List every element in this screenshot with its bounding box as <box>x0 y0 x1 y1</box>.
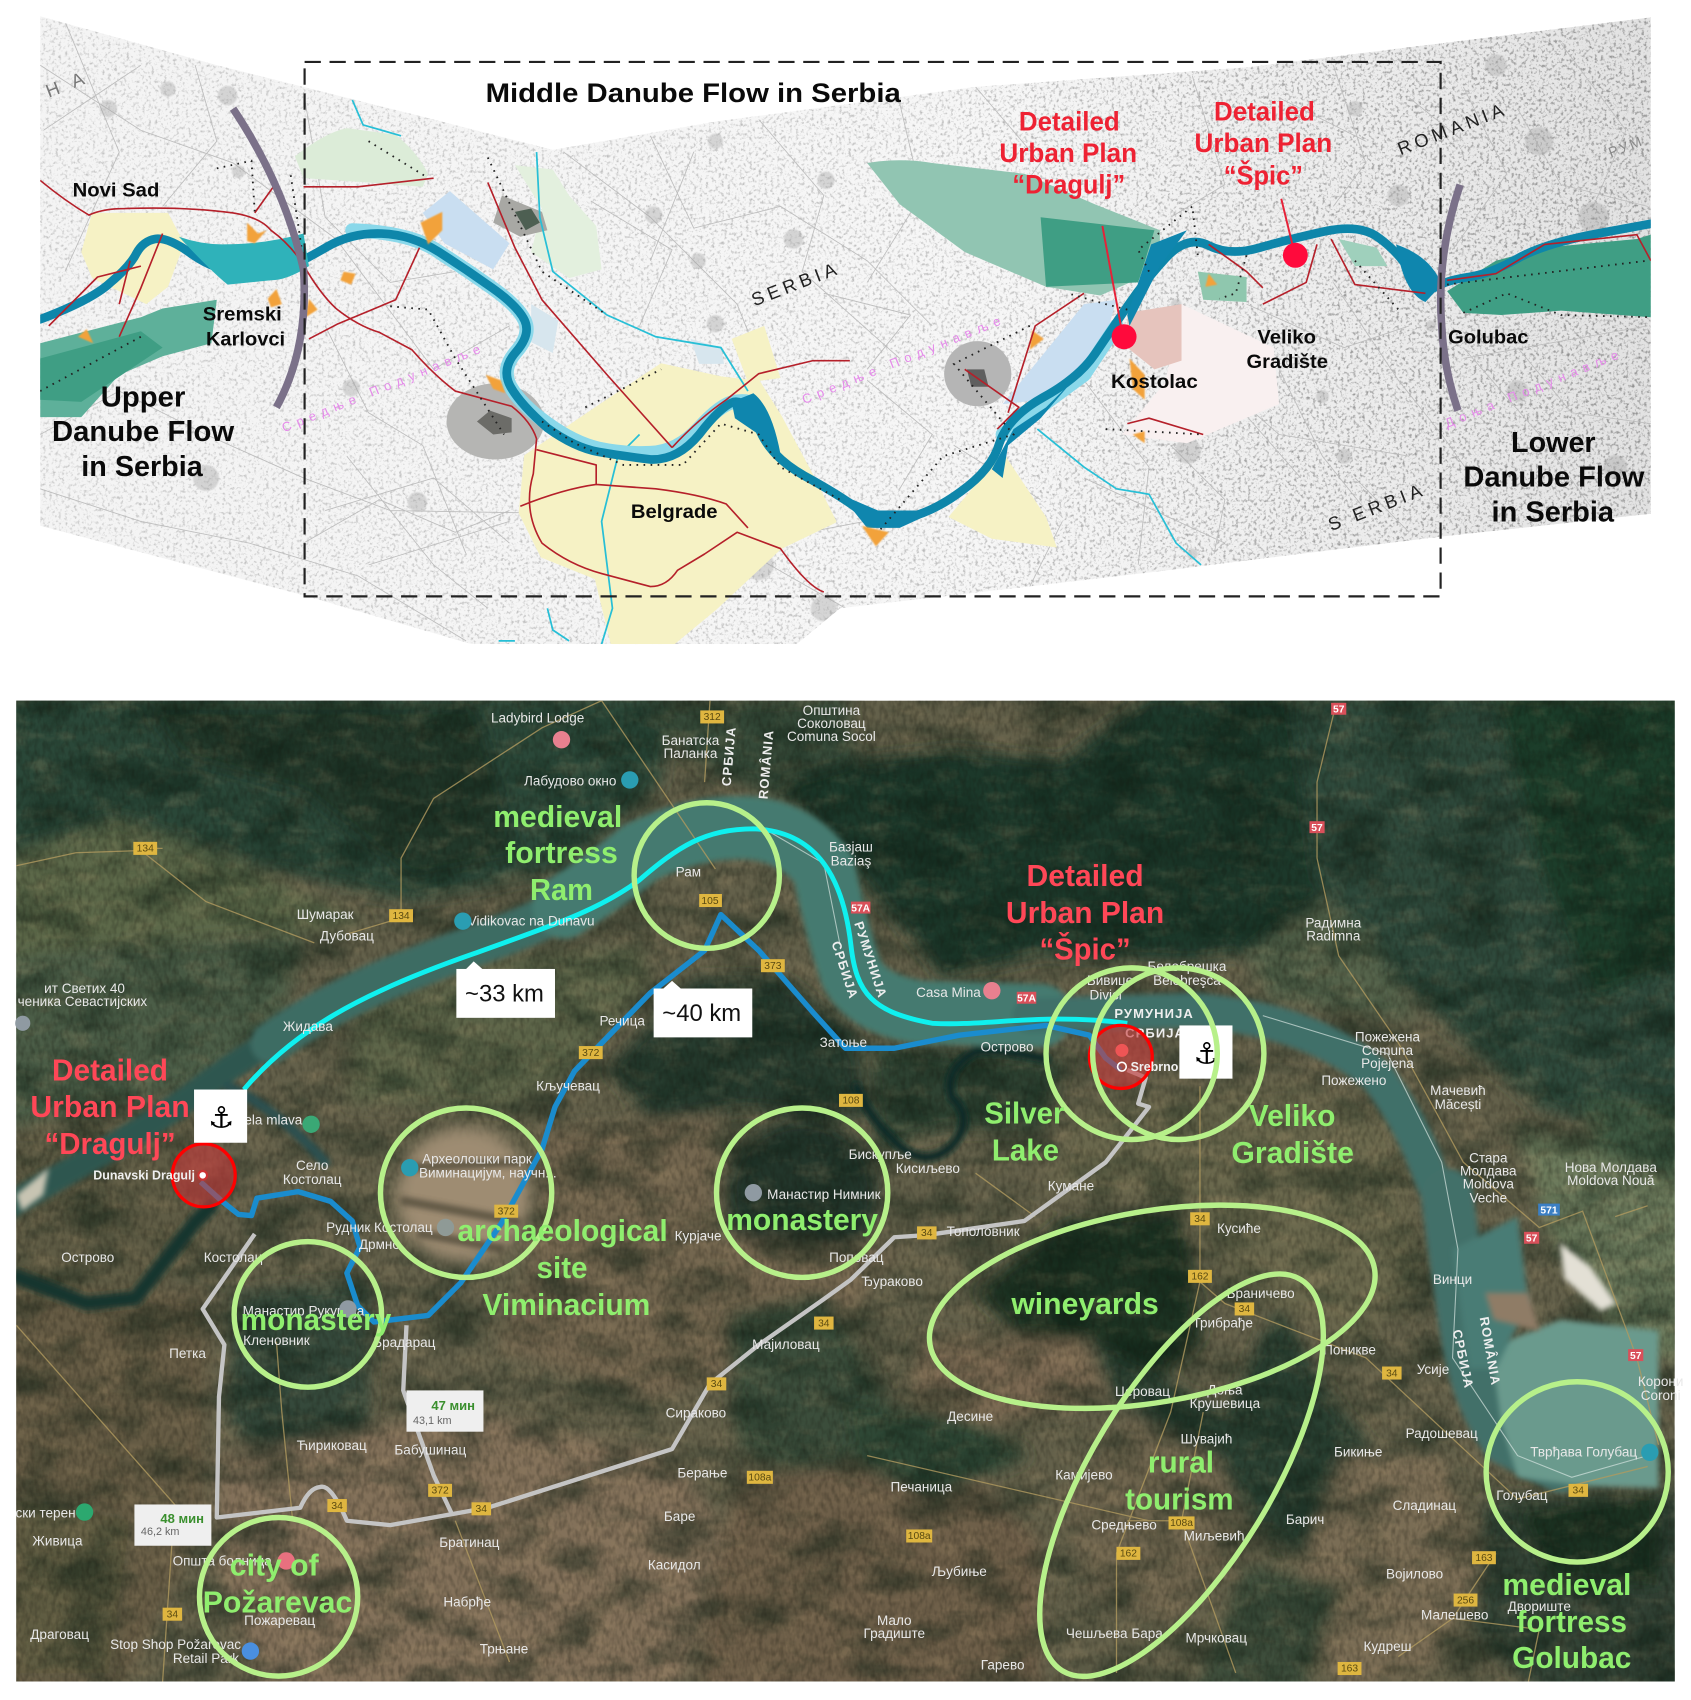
Cyrillic place names: Братинац <box>439 1535 500 1550</box>
Cyrillic place names: Bela mlava <box>235 1112 303 1127</box>
Cyrillic place names: Comuna Socol <box>787 729 876 744</box>
red pointer: Dragulj <box>1102 226 1137 349</box>
bold border labels: ROMÂNIA <box>1477 1316 1504 1387</box>
Cyrillic place names: Пожежено <box>1321 1073 1386 1088</box>
Cyrillic place names: Острово <box>980 1039 1034 1055</box>
road shields: 372 <box>582 1048 600 1059</box>
label: medieval fortress Ram: medieval <box>493 800 622 834</box>
Cyrillic place names: Село <box>296 1158 328 1173</box>
distance box: ~40 km <box>654 981 752 1037</box>
Cyrillic place names: Baziaş <box>831 854 871 869</box>
Cyrillic place names: Драговац <box>30 1627 89 1642</box>
label: medieval fortress Ram: Ram <box>530 873 593 907</box>
Cyrillic place names: Belobreşca <box>1153 973 1221 988</box>
arc: upper-middle boundary <box>233 109 304 407</box>
road shields: 108a <box>908 1531 931 1542</box>
Cyrillic place names: Гарево <box>981 1658 1025 1673</box>
distance box: ~40 km: ~40 km <box>662 1000 741 1027</box>
Cyrillic place names: Острово <box>61 1250 114 1265</box>
route time cards: 47 мин <box>431 1398 475 1413</box>
Cyrillic place names: Сираково <box>666 1406 726 1421</box>
Cyrillic place names: Манастир Нимник <box>767 1187 881 1202</box>
label: archaeological site Viminacium <box>457 1214 668 1322</box>
label: Silver Lake <box>984 1097 1065 1168</box>
Cyrillic place names: Кључевац <box>536 1079 600 1094</box>
light-blue hatched floodplains <box>423 191 509 269</box>
label: Detailed Urban Plan Špic: Urban Plan <box>1006 896 1164 930</box>
bold border labels: РУМУНИЈА <box>1114 1006 1194 1021</box>
anchor: Špic: ⚓ <box>1193 1036 1220 1070</box>
bold border labels: СРБИЈА <box>1125 1025 1185 1040</box>
red road shields: 57A <box>1017 994 1037 1005</box>
Cyrillic place names: Општа болница <box>173 1553 272 1568</box>
tributary rivers <box>352 100 1201 644</box>
label: Silver Lake: Lake <box>992 1134 1059 1168</box>
map sheet background <box>40 16 1651 644</box>
Cyrillic place names: Доња <box>1207 1383 1243 1398</box>
Cyrillic place names: Петка <box>169 1346 206 1361</box>
yellow urban territory: Novi Sad <box>81 213 184 304</box>
Cyrillic place names: Двориште <box>1508 1599 1571 1614</box>
Cyrillic place names: Костолац <box>204 1250 263 1265</box>
Cyrillic place names: ит Светих 40 <box>44 981 125 996</box>
anchor: Špic <box>1179 1025 1232 1079</box>
road shields: 34 <box>1386 1368 1398 1379</box>
red pointer: Špic <box>1281 199 1308 268</box>
callout: Detailed Urban Plan Špic: Urban Plan <box>1195 127 1332 158</box>
Cyrillic place names: Виминацијум, научн... <box>419 1165 557 1181</box>
label: city of Požarevac: city of <box>230 1549 320 1583</box>
city labels: Gradište <box>1247 351 1328 373</box>
Cyrillic place names: Молдава <box>1460 1163 1517 1178</box>
Cyrillic place names: Пожежена <box>1355 1030 1420 1045</box>
label: medieval fortress Ram <box>493 800 622 907</box>
road shields: 105 <box>701 896 719 907</box>
road shields: 372 <box>432 1486 449 1497</box>
attraction rings <box>199 803 1668 1700</box>
Cyrillic place names: Coroni <box>1641 1388 1681 1403</box>
callout: Detailed Urban Plan Dragulj: Urban Plan <box>999 137 1137 168</box>
city labels: Belgrade <box>631 501 718 523</box>
label: medieval fortress Golubac: medieval <box>1502 1568 1631 1602</box>
Cyrillic place names: Бикиње <box>1334 1445 1382 1460</box>
label: wineyards: wineyards <box>1010 1287 1159 1321</box>
Danube river <box>40 224 1651 520</box>
marker: Špic: Srebrno <box>1131 1060 1179 1074</box>
Viminacium archaeological mine pit <box>397 1128 531 1262</box>
bold border labels: СРБИЈА <box>829 939 861 1001</box>
callout: Detailed Urban Plan Dragulj <box>999 105 1137 199</box>
Cyrillic place names: Мачевић <box>1430 1083 1486 1098</box>
road shields: 34 <box>476 1504 487 1515</box>
Cyrillic place names: Барич <box>1286 1512 1324 1527</box>
heading: Lower Danube Flow in Serbia: Lower <box>1511 426 1596 458</box>
label: monastery Nimnik: monastery <box>726 1203 878 1237</box>
city labels: Kostolac <box>1111 371 1198 393</box>
label: archaeological site Viminacium: site <box>537 1251 588 1285</box>
label: archaeological site Viminacium: Viminacium <box>482 1288 650 1322</box>
route time cards: 46,2 km <box>141 1526 179 1538</box>
road shields: 34 <box>167 1609 178 1620</box>
pink region labels: Средње Подунавље <box>280 339 488 435</box>
callout: Detailed Urban Plan Špic: “Špic” <box>1224 160 1303 191</box>
country labels: Н А <box>43 66 91 102</box>
Cyrillic place names: Divici <box>1089 987 1122 1002</box>
Cyrillic place names: Pojejena <box>1361 1056 1414 1071</box>
Cyrillic place names: Миљевић <box>1184 1528 1245 1543</box>
Cyrillic place names: Набрђе <box>443 1595 491 1610</box>
panel: satellite route map <box>0 695 1691 1700</box>
heading: Upper Danube Flow in Serbia: Upper <box>101 380 185 412</box>
anchor: Dragulj: ⚓ <box>208 1101 234 1135</box>
Cyrillic place names: Берање <box>677 1465 727 1480</box>
label: rural tourism <box>1125 1445 1234 1516</box>
Cyrillic place names: Живица <box>32 1534 83 1549</box>
Cyrillic place names: Усије <box>1417 1362 1449 1377</box>
red road shields: 57 <box>1311 823 1323 834</box>
label: Veliko Gradište <box>1231 1099 1354 1170</box>
red road shields: 57 <box>1630 1351 1642 1362</box>
Cyrillic place names: Сладинац <box>1393 1498 1456 1513</box>
road shields: 163 <box>1341 1664 1358 1675</box>
Cyrillic place names: Дрмно <box>359 1237 400 1252</box>
country labels: ROMANIA <box>1394 98 1511 159</box>
Cyrillic place names: Стара <box>1469 1150 1508 1165</box>
Cyrillic place names: Печаница <box>891 1479 953 1494</box>
Cyrillic place names: Манастир Рукумија <box>243 1303 365 1318</box>
Cyrillic place names: Костолац <box>283 1172 342 1187</box>
Cyrillic place names: Затоње <box>820 1035 867 1050</box>
Cyrillic place names: ски терен <box>15 1505 76 1521</box>
Cyrillic place names: Нова Молдава <box>1565 1160 1657 1175</box>
pink region labels <box>280 311 1626 435</box>
Cyrillic place names: Баре <box>664 1509 695 1524</box>
route time cards: 48 мин <box>160 1511 204 1526</box>
red road network <box>40 178 1651 592</box>
label: Silver Lake: Silver <box>984 1097 1065 1131</box>
Cyrillic place names: Малешево <box>1421 1608 1488 1623</box>
Cyrillic place names: Винци <box>1433 1272 1472 1287</box>
road shields: 134 <box>137 844 154 855</box>
country labels: SERBIA <box>748 257 843 310</box>
road shields: 108a <box>1170 1518 1193 1529</box>
anchor: Dragulj <box>194 1090 247 1143</box>
label: city of Požarevac <box>203 1549 352 1620</box>
Cyrillic place names: Општина <box>803 703 861 718</box>
Cyrillic place names: Кудреш <box>1363 1639 1411 1654</box>
road shields: 162 <box>1120 1549 1137 1560</box>
bold border labels: СРБИЈА <box>719 726 739 787</box>
label: rural tourism: tourism <box>1125 1482 1234 1516</box>
Cyrillic place names: Крушевица <box>1190 1396 1261 1411</box>
Cyrillic place names: Ћириковац <box>297 1438 367 1453</box>
label: medieval fortress Golubac: Golubac <box>1512 1641 1631 1675</box>
Cyrillic place names: Vidikovac na Dunavu <box>468 913 595 928</box>
satellite imagery <box>0 695 1691 1695</box>
Cyrillic place names: Војилово <box>1386 1566 1443 1581</box>
Cyrillic place names: Шувајић <box>1181 1432 1232 1447</box>
pink hatched Kostolac area <box>1122 304 1279 443</box>
Cyrillic place names: Мало <box>877 1613 912 1628</box>
Cyrillic place names: Радошевац <box>1406 1426 1478 1441</box>
Cyrillic place names: Голубац <box>1496 1488 1548 1503</box>
Cyrillic place names: Банатска <box>662 733 720 748</box>
Cyrillic place names: Трибрађе <box>1192 1315 1253 1330</box>
road shields: 163 <box>1475 1553 1493 1564</box>
title: Middle Danube Flow in Serbia: Middle Danube Flow in Serbia <box>486 77 902 108</box>
Cyrillic place names: Браничево <box>1227 1286 1295 1301</box>
road shields: 134 <box>392 911 410 922</box>
regional thin roads <box>16 701 1658 1682</box>
Cyrillic place names: Камијево <box>1055 1467 1113 1482</box>
road shields: 34 <box>711 1379 722 1390</box>
road shields: 34 <box>1239 1304 1250 1315</box>
distance box: ~33 km <box>456 961 555 1018</box>
arc: middle-lower boundary <box>1441 185 1460 411</box>
Cyrillic place names: Retail Park <box>173 1651 239 1666</box>
heading: Upper Danube Flow in Serbia: Danube Flow <box>52 415 234 447</box>
Cyrillic place names: Бивице <box>1087 973 1133 988</box>
callout: Detailed Urban Plan Dragulj: “Dragulj” <box>1012 168 1125 199</box>
road shields: 373 <box>764 961 782 972</box>
road shields: 34 <box>921 1228 933 1239</box>
Cyrillic place names: Брадарац <box>373 1335 436 1350</box>
callout: Detailed Urban Plan Dragulj: Detailed <box>1019 105 1120 136</box>
panel: Danube regional plan map <box>40 16 1651 644</box>
grey alternative road routes <box>203 1070 1149 1525</box>
label: Detailed Urban Plan Špic <box>1006 859 1164 967</box>
Cyrillic place names: Тврђава Голубац <box>1530 1445 1637 1460</box>
Cyrillic place names: Радимна <box>1305 916 1362 931</box>
heading: Upper Danube Flow in Serbia: in Serbia <box>81 450 203 482</box>
marker: Dragulj <box>93 1144 235 1207</box>
pink region labels: Доња Подунавље <box>1443 345 1626 431</box>
label: monastery Rukumija: monastery <box>241 1303 391 1337</box>
city labels: Sremski <box>203 303 282 325</box>
Cyrillic place names: Мрчковац <box>1185 1630 1247 1645</box>
label: Veliko Gradište: Gradište <box>1231 1136 1354 1170</box>
Cyrillic place names: Рам <box>676 865 701 880</box>
POI pins <box>15 731 1658 1660</box>
country labels: РУМ <box>1606 132 1646 160</box>
route: river cruise (cyan) <box>244 829 1127 1090</box>
Cyrillic place names: Moldova <box>1463 1176 1514 1191</box>
Cyrillic place names: Тополовник <box>947 1224 1020 1239</box>
road shields: 108 <box>842 1096 860 1107</box>
Cyrillic place names: Ladybird Lodge <box>491 710 584 725</box>
label: Detailed Urban Plan Dragulj: Detailed <box>52 1053 168 1087</box>
label: Detailed Urban Plan Dragulj: Urban Plan <box>30 1090 190 1124</box>
Cyrillic place names: Церовац <box>1115 1384 1170 1399</box>
Cyrillic place names: Шумарак <box>297 907 354 922</box>
Cyrillic place names: Кусиће <box>1217 1221 1261 1236</box>
Cyrillic place names: Паланка <box>664 746 718 761</box>
Cyrillic place names: Бискупље <box>849 1147 912 1162</box>
Cyrillic place names: Касидол <box>648 1558 701 1573</box>
Cyrillic place names: Мајиловац <box>752 1337 820 1352</box>
Cyrillic place names: Поповац <box>829 1250 884 1265</box>
red road shields: 57A <box>851 903 871 914</box>
bold border labels <box>719 726 1504 1390</box>
Cyrillic place names: Radimna <box>1306 929 1361 944</box>
Cyrillic place names: Veche <box>1469 1190 1507 1205</box>
Cyrillic place names: Трњане <box>480 1641 528 1656</box>
marker: Dragulj: Dunavski Dragulj <box>93 1169 195 1183</box>
marker: Špic <box>1089 1025 1179 1088</box>
yellow urban territory: Belgrade <box>520 365 835 644</box>
road shields: 162 <box>1191 1272 1209 1283</box>
Cyrillic place names: Moldova Nouă <box>1567 1173 1655 1188</box>
Cyrillic place names: Comuna <box>1362 1043 1414 1058</box>
red road shields: 571 <box>1540 1205 1558 1216</box>
Cyrillic place names: Casa Mina <box>916 985 981 1000</box>
label: Detailed Urban Plan Špic: Detailed <box>1027 859 1144 893</box>
Cyrillic place names: Базјаш <box>829 840 873 855</box>
label: Detailed Urban Plan Špic: “Špic” <box>1040 933 1131 967</box>
Cyrillic place names: Речица <box>599 1013 645 1028</box>
bold border labels: СРБИЈА <box>1450 1328 1477 1390</box>
label: Detailed Urban Plan Dragulj: “Dragulj” <box>44 1127 176 1161</box>
road shields: 312 <box>704 712 721 723</box>
label: medieval fortress Golubac: fortress <box>1516 1605 1627 1639</box>
Cyrillic place names: Соколовац <box>797 716 866 731</box>
Danube water <box>5 828 1561 1466</box>
Cyrillic place names: Лабудово окно <box>524 773 616 788</box>
heading: Upper Danube Flow in Serbia <box>52 380 234 482</box>
Cyrillic place names: Stop Shop Požarevac <box>110 1637 241 1652</box>
Cyrillic place names: Кумане <box>1048 1179 1094 1194</box>
road shields: 34 <box>1573 1486 1584 1497</box>
city labels: Veliko <box>1257 326 1316 348</box>
road shields: 34 <box>331 1501 343 1512</box>
country labels: S ERBIA <box>1325 478 1429 535</box>
callout: Detailed Urban Plan Špic <box>1195 96 1332 191</box>
city labels: Golubac <box>1448 326 1529 348</box>
Cyrillic place names: Средњево <box>1091 1517 1157 1532</box>
label: Veliko Gradište: Veliko <box>1249 1099 1335 1133</box>
road shields: 34 <box>1194 1214 1206 1225</box>
label: Detailed Urban Plan Dragulj <box>30 1053 190 1161</box>
Cyrillic place names: Поникве <box>1323 1343 1376 1358</box>
heading: Lower Danube Flow in Serbia: Danube Flow <box>1463 461 1644 493</box>
route: road (blue) <box>201 915 1121 1322</box>
Cyrillic place names: Градиште <box>864 1626 925 1641</box>
green protected areas <box>295 128 428 187</box>
Cyrillic place names: Пожаревац <box>244 1613 315 1628</box>
Cyrillic place names: Белобрешка <box>1147 959 1227 974</box>
Cyrillic place names: Љубиње <box>932 1564 987 1579</box>
road shields: 108a <box>748 1473 772 1484</box>
Cyrillic place names: Курјаче <box>675 1228 722 1244</box>
Cyrillic place names: Десине <box>947 1409 993 1424</box>
route time cards <box>134 1390 483 1546</box>
label: archaeological site Viminacium: archaeological <box>457 1214 668 1248</box>
heading: Lower Danube Flow in Serbia <box>1463 426 1644 527</box>
label: rural tourism: rural <box>1148 1445 1214 1479</box>
Cyrillic place names: Жидава <box>283 1019 333 1034</box>
Cyrillic place names: Корони <box>1638 1374 1683 1389</box>
bold border labels: РУМУНИЈА <box>851 920 890 1000</box>
label: medieval fortress Golubac <box>1502 1568 1631 1675</box>
country labels <box>43 66 1646 535</box>
road shields <box>133 710 1588 1675</box>
Cyrillic place names <box>15 703 1683 1673</box>
dotted boundaries <box>40 141 1651 532</box>
road shields: 256 <box>1457 1595 1474 1606</box>
bold border labels: ROMÂNIA <box>756 729 777 800</box>
Cyrillic place names: ченика Севастијских <box>18 994 147 1009</box>
Cyrillic place names: Ђураково <box>861 1274 923 1289</box>
Cyrillic place names: Дубовац <box>320 929 374 944</box>
Cyrillic place names: Чешљева Бара <box>1066 1626 1163 1641</box>
grey mining circles <box>447 383 544 459</box>
distance box: ~33 km: ~33 km <box>465 981 544 1008</box>
red road shields: 57 <box>1333 705 1345 716</box>
label: medieval fortress Ram: fortress <box>505 836 618 870</box>
red road shields: 57 <box>1526 1234 1538 1245</box>
Cyrillic place names: Археолошки парк <box>422 1151 532 1166</box>
city labels: Novi Sad <box>73 180 159 202</box>
route time cards: 43,1 km <box>413 1415 452 1427</box>
road shields: 34 <box>818 1318 830 1329</box>
Cyrillic place names: Кленовник <box>243 1333 310 1348</box>
callout: Detailed Urban Plan Špic: Detailed <box>1214 96 1315 127</box>
dashed frame: middle Danube <box>305 62 1441 596</box>
road shields: 372 <box>498 1206 515 1217</box>
Cyrillic place names: Бабушинац <box>394 1442 466 1458</box>
heading: Lower Danube Flow in Serbia: in Serbia <box>1492 495 1614 527</box>
settlement orange patches <box>78 212 1217 546</box>
red road shields <box>851 703 1643 1362</box>
Cyrillic place names: Рудник Костолац <box>326 1220 433 1235</box>
Cyrillic place names: Кисиљево <box>896 1161 960 1176</box>
Cyrillic place names: Măcești <box>1435 1097 1481 1112</box>
label: city of Požarevac: Požarevac <box>203 1586 352 1620</box>
city labels: Karlovci <box>206 328 285 350</box>
city labels <box>73 180 1529 523</box>
pink region labels: Средње Подунавље <box>800 311 1008 407</box>
